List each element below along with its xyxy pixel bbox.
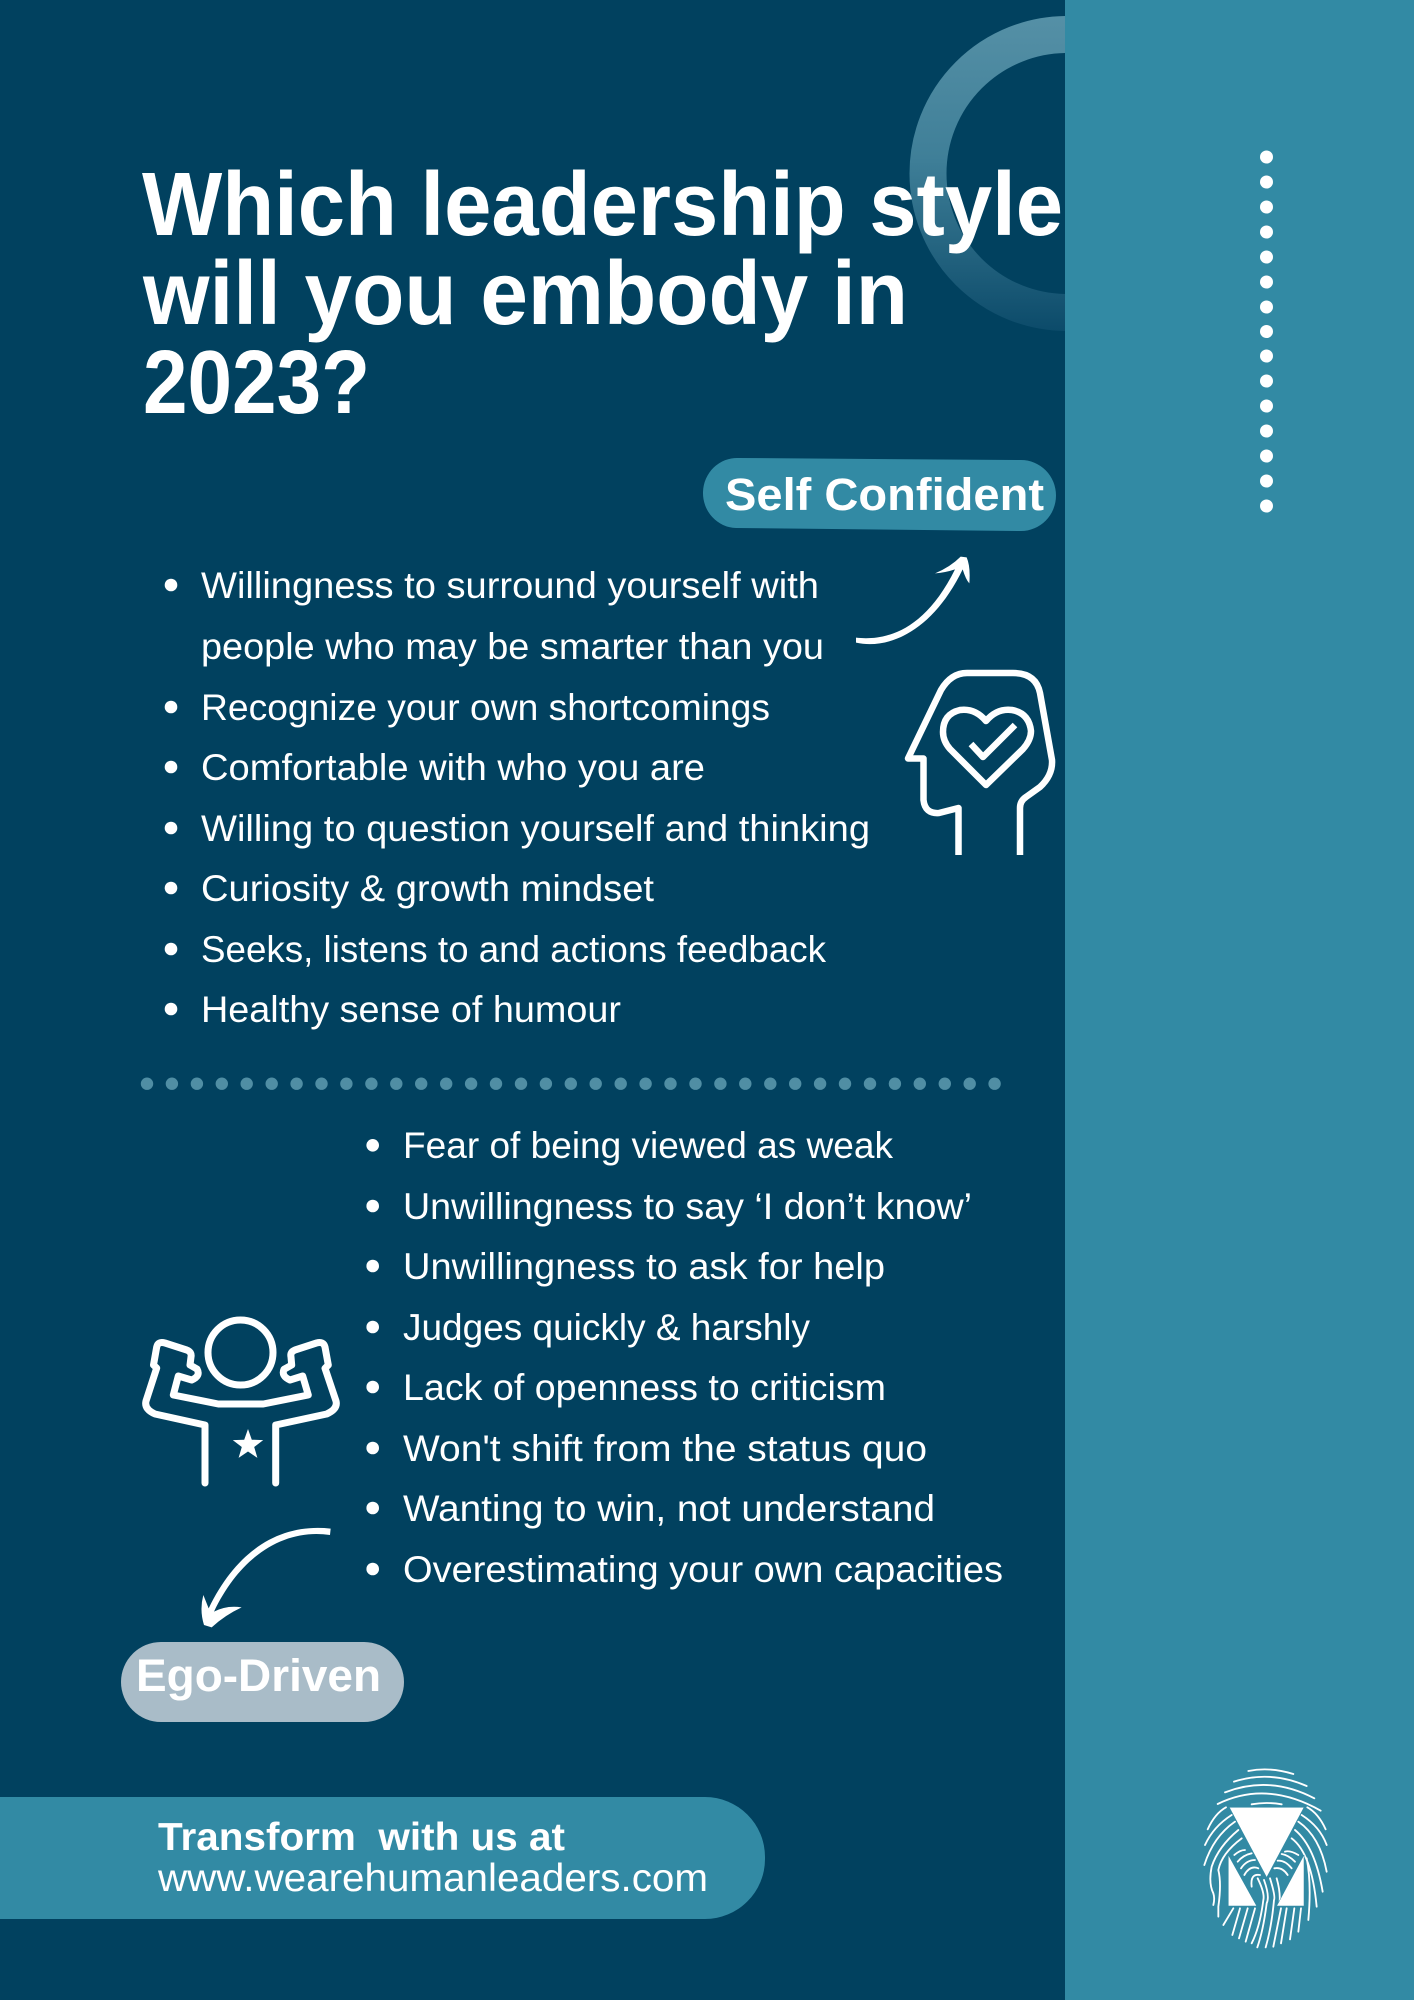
- arrow: down to Ego-Driven: [201, 1528, 331, 1627]
- title: Which leadership style: [142, 155, 1063, 255]
- bullet list: self confident traits: Willing to question yourself and thinking: [201, 808, 870, 849]
- bullet list: self confident traits: Comfortable with who you are: [201, 747, 705, 788]
- bullet list: ego-driven traits: Lack of openness to criticism: [403, 1367, 886, 1408]
- footer call to action: www.wearehumanleaders.com: [157, 1857, 708, 1900]
- arrow: up to Self Confident: [856, 557, 970, 644]
- label pill: Ego-Driven: [121, 1642, 404, 1722]
- bullet list: ego-driven traits: Judges quickly & harshly: [403, 1307, 810, 1348]
- footer call to action: [0, 1797, 765, 1919]
- decorative ring: [910, 16, 1065, 331]
- bullet list: ego-driven traits: Unwillingness to say ‘I don’t know’: [403, 1186, 972, 1227]
- title: [142, 155, 1063, 433]
- bullet list: ego-driven traits: Overestimating your own capacities: [403, 1549, 1003, 1590]
- bullet list: ego-driven traits: Fear of being viewed as weak: [403, 1125, 893, 1166]
- background: navy panel: [0, 0, 1065, 2000]
- label pill: Self Confident: [703, 458, 1056, 531]
- bullet list: ego-driven traits: [366, 1125, 1003, 1590]
- label pill: Ego-Driven: Ego-Driven: [136, 1650, 381, 1701]
- bullet list: self confident traits: Curiosity & growth mindset: [201, 868, 655, 909]
- icon: head with heart and check: [908, 673, 1052, 855]
- icon: flexing figure with star: [146, 1320, 336, 1483]
- right teal sidebar: [1065, 0, 1414, 2000]
- bullet list: ego-driven traits: Unwillingness to ask for help: [403, 1246, 885, 1287]
- vertical dotted column: [1260, 150, 1273, 512]
- title: will you embody in: [142, 244, 908, 344]
- bullet list: ego-driven traits: Wanting to win, not understand: [403, 1488, 935, 1529]
- bullet list: self confident traits: Recognize your own shortcomings: [201, 687, 770, 728]
- bullet list: self confident traits: Healthy sense of humour: [201, 989, 621, 1030]
- label pill: Self Confident: Self Confident: [725, 469, 1044, 520]
- title: 2023?: [143, 333, 370, 433]
- bullet list: self confident traits: [165, 565, 870, 1030]
- logo: fingerprint with M: [1204, 1769, 1327, 1947]
- horizontal dotted divider: [141, 1078, 1001, 1090]
- bullet list: self confident traits: Willingness to surround yourself with: [201, 565, 819, 606]
- bullet list: self confident traits: Seeks, listens to and actions feedback: [201, 929, 826, 970]
- bullet list: self confident traits: people who may be smarter than you: [201, 626, 824, 667]
- footer call to action: Transform with us at: [158, 1816, 565, 1859]
- bullet list: ego-driven traits: Won't shift from the status quo: [403, 1428, 927, 1469]
